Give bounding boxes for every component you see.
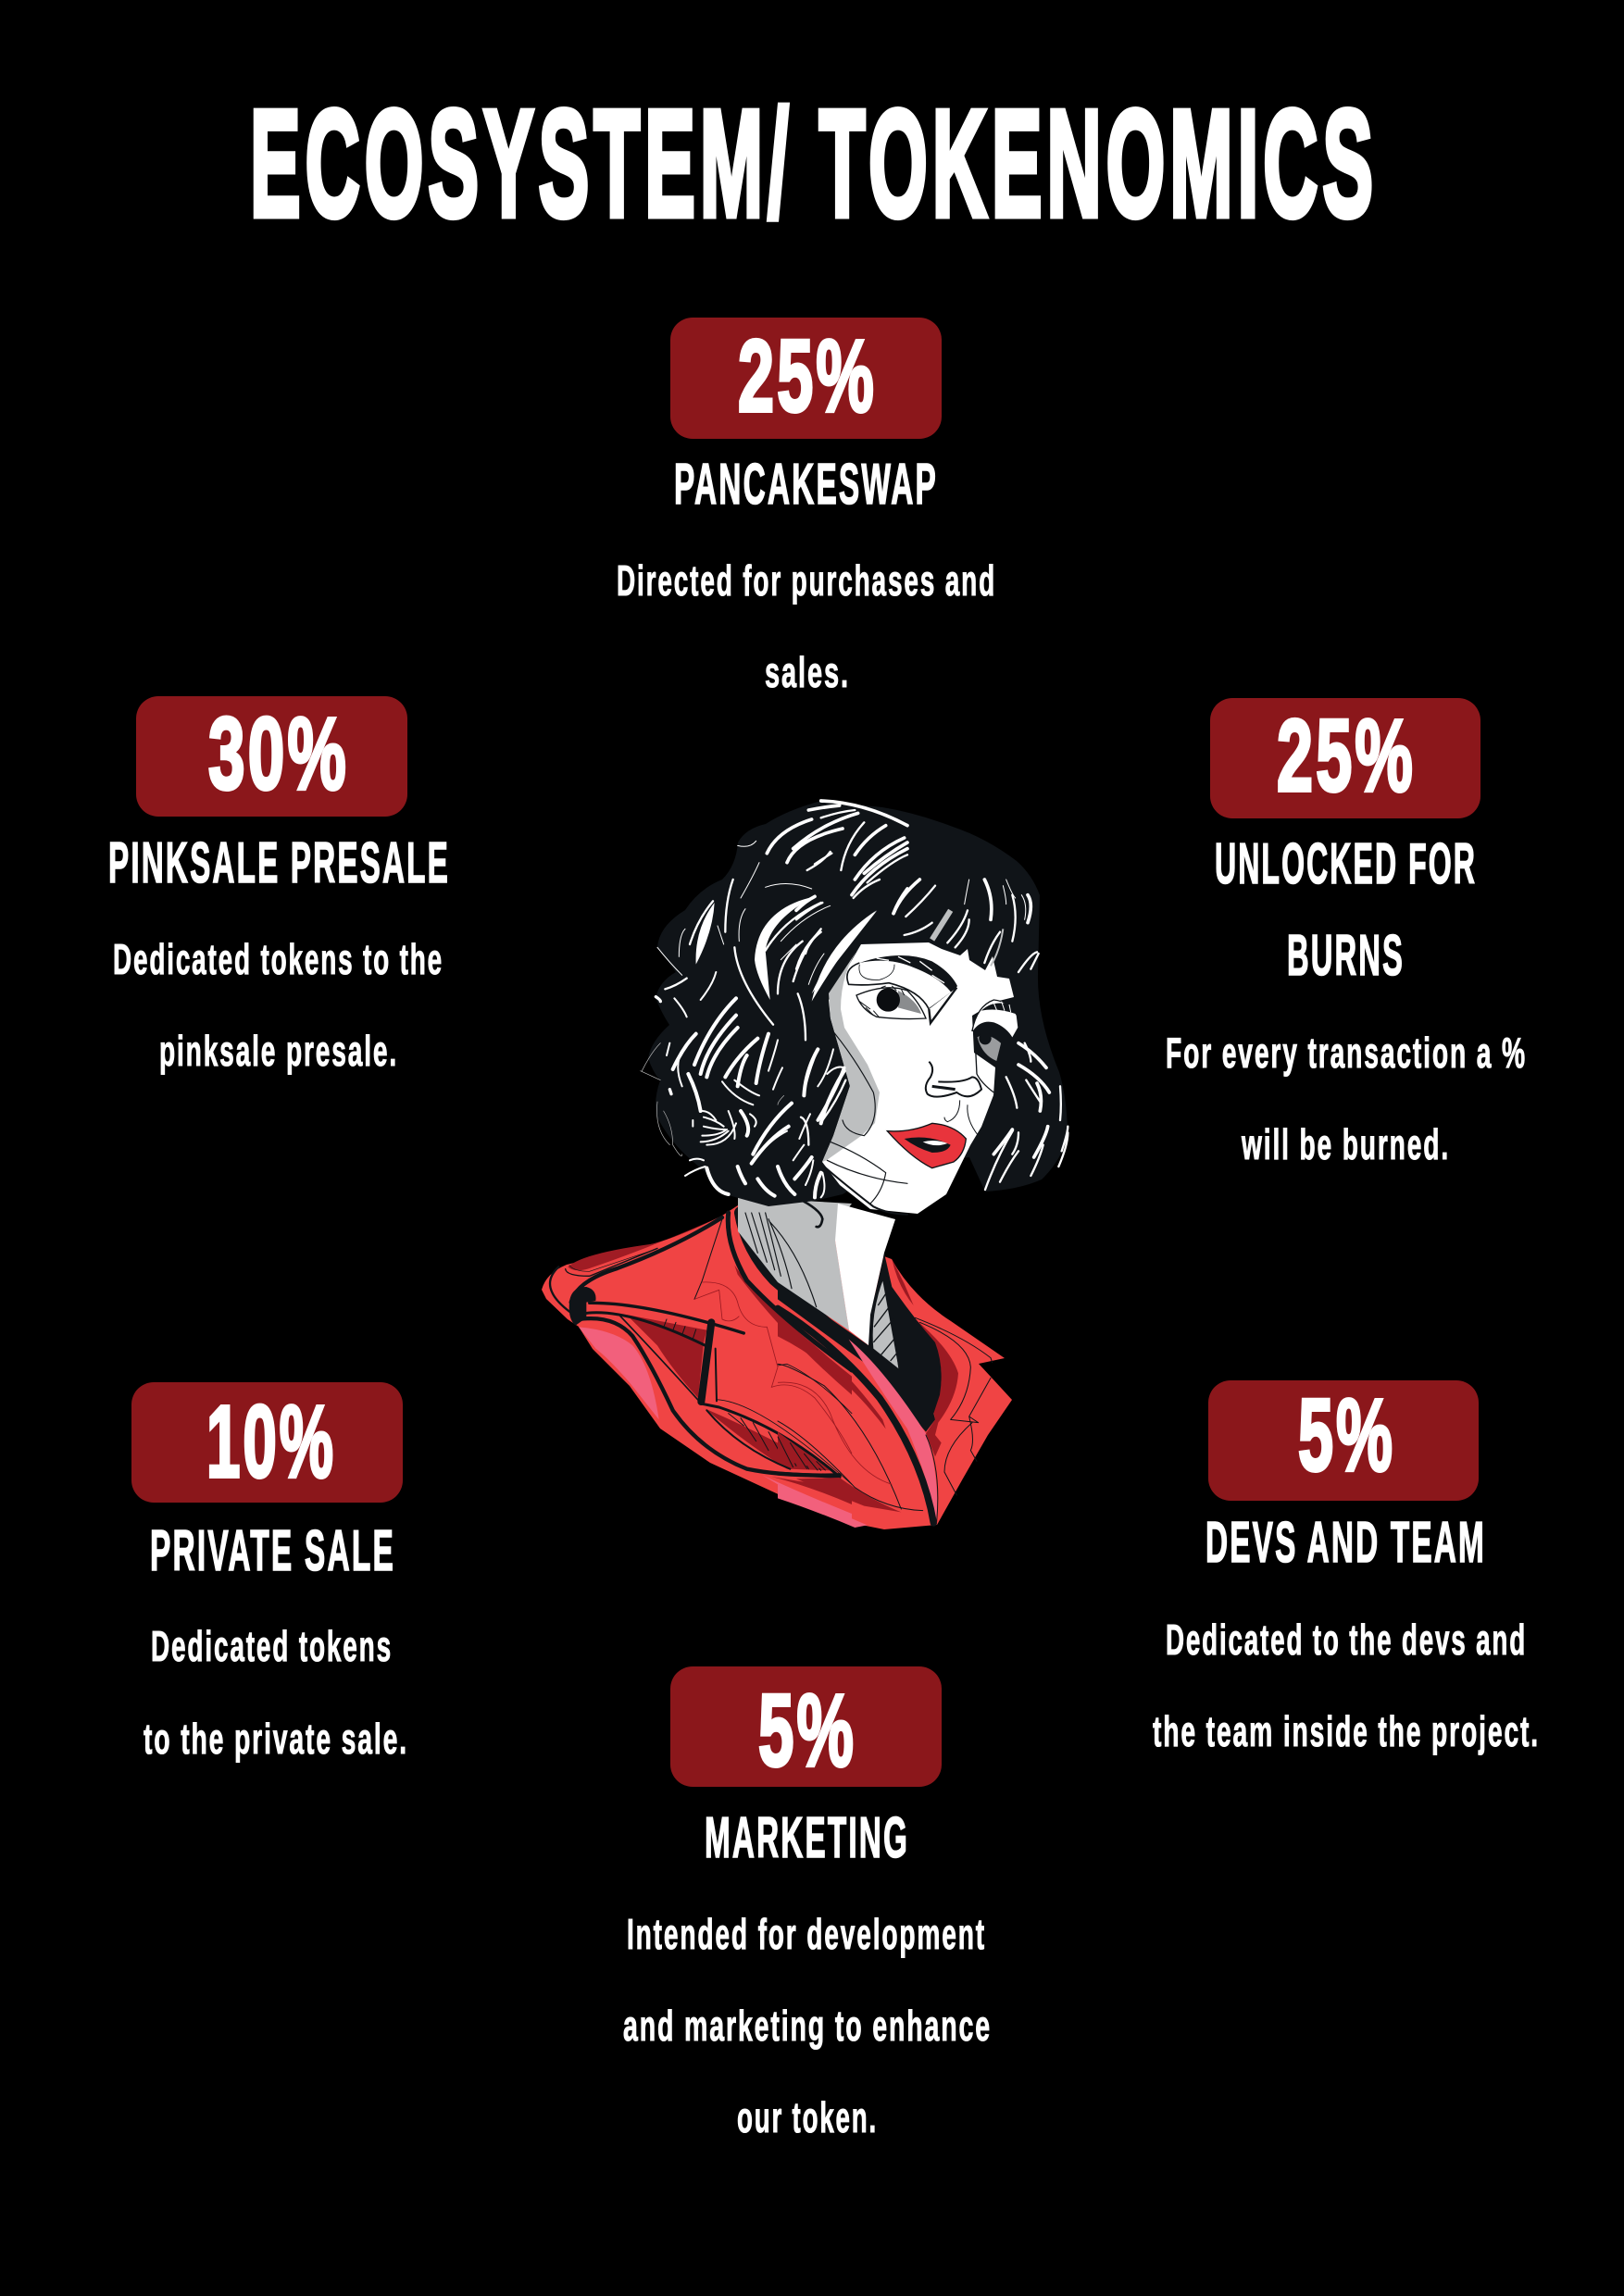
description: marketing: and marketing to enhance [623,2002,992,2050]
heading: pinksale presale: PINKSALE PRESALE [108,831,450,895]
description: marketing: our token. [737,2093,878,2141]
panel: pancakeswap 25% [617,318,996,696]
description: private sale: to the private sale. [144,1715,408,1763]
panel: private sale 10% [131,1382,408,1763]
hair highlights: lower left curls [641,972,844,1197]
percent badge: 25%: 25% [738,319,877,433]
description: pinksale presale: Dedicated tokens to the [113,935,443,983]
panel: devs and team 5% [1153,1379,1540,1755]
description: marketing: Intended for development [627,1910,986,1958]
jacket [542,1204,1012,1529]
percent badge: 30%: 30% [208,697,349,811]
percent badge: 10% [131,1382,403,1503]
neck [738,1197,895,1345]
percent badge: 25%: 25% [1277,699,1416,813]
hair highlights: top left [657,801,907,1025]
percent badge: 30% [136,696,407,817]
description: burns [1166,1029,1527,1168]
description: pancakeswap: sales. [765,648,850,696]
percent badge: 25% [1210,698,1480,818]
heading: pancakeswap: PANCAKESWAP [674,453,938,517]
heading: unlocked for burns: BURNS [1287,924,1405,988]
percent badge: 5%: 5% [758,1674,856,1788]
heading: private sale: PRIVATE SALE [150,1519,395,1583]
description: burns: will be burned. [1241,1120,1450,1168]
panel: unlocked for burns 25% [1166,698,1527,1168]
facial features [847,910,1018,1168]
description: private sale [144,1622,408,1763]
percent badge: 5%: 5% [1298,1379,1395,1492]
panel: pinksale presale 30% [108,696,450,1075]
percent badge: 25% [670,318,942,439]
heading: unlocked for burns [1215,832,1477,988]
panel: marketing 5% [623,1666,992,2141]
percent badge: 5% [670,1666,942,1788]
description: pinksale presale [113,935,443,1075]
heading: marketing: MARKETING [705,1806,909,1870]
description: devs and team [1153,1616,1540,1755]
percent badge: 10%: 10% [206,1385,336,1499]
description: pinksale presale: pinksale presale. [159,1027,398,1075]
illustration: portrait of woman in red jacket [542,801,1068,1529]
hair highlights: fringe and right side [796,880,1068,1190]
percent badge: 5% [1208,1379,1479,1501]
description: marketing [623,1910,992,2141]
description: pancakeswap [617,556,996,696]
description: private sale: Dedicated tokens [151,1622,393,1670]
face [822,942,1014,1214]
description: pancakeswap: Directed for purchases and [617,556,996,605]
hair mass [648,801,1068,1206]
lower-left hair curl and jaw lines [796,1025,907,1227]
